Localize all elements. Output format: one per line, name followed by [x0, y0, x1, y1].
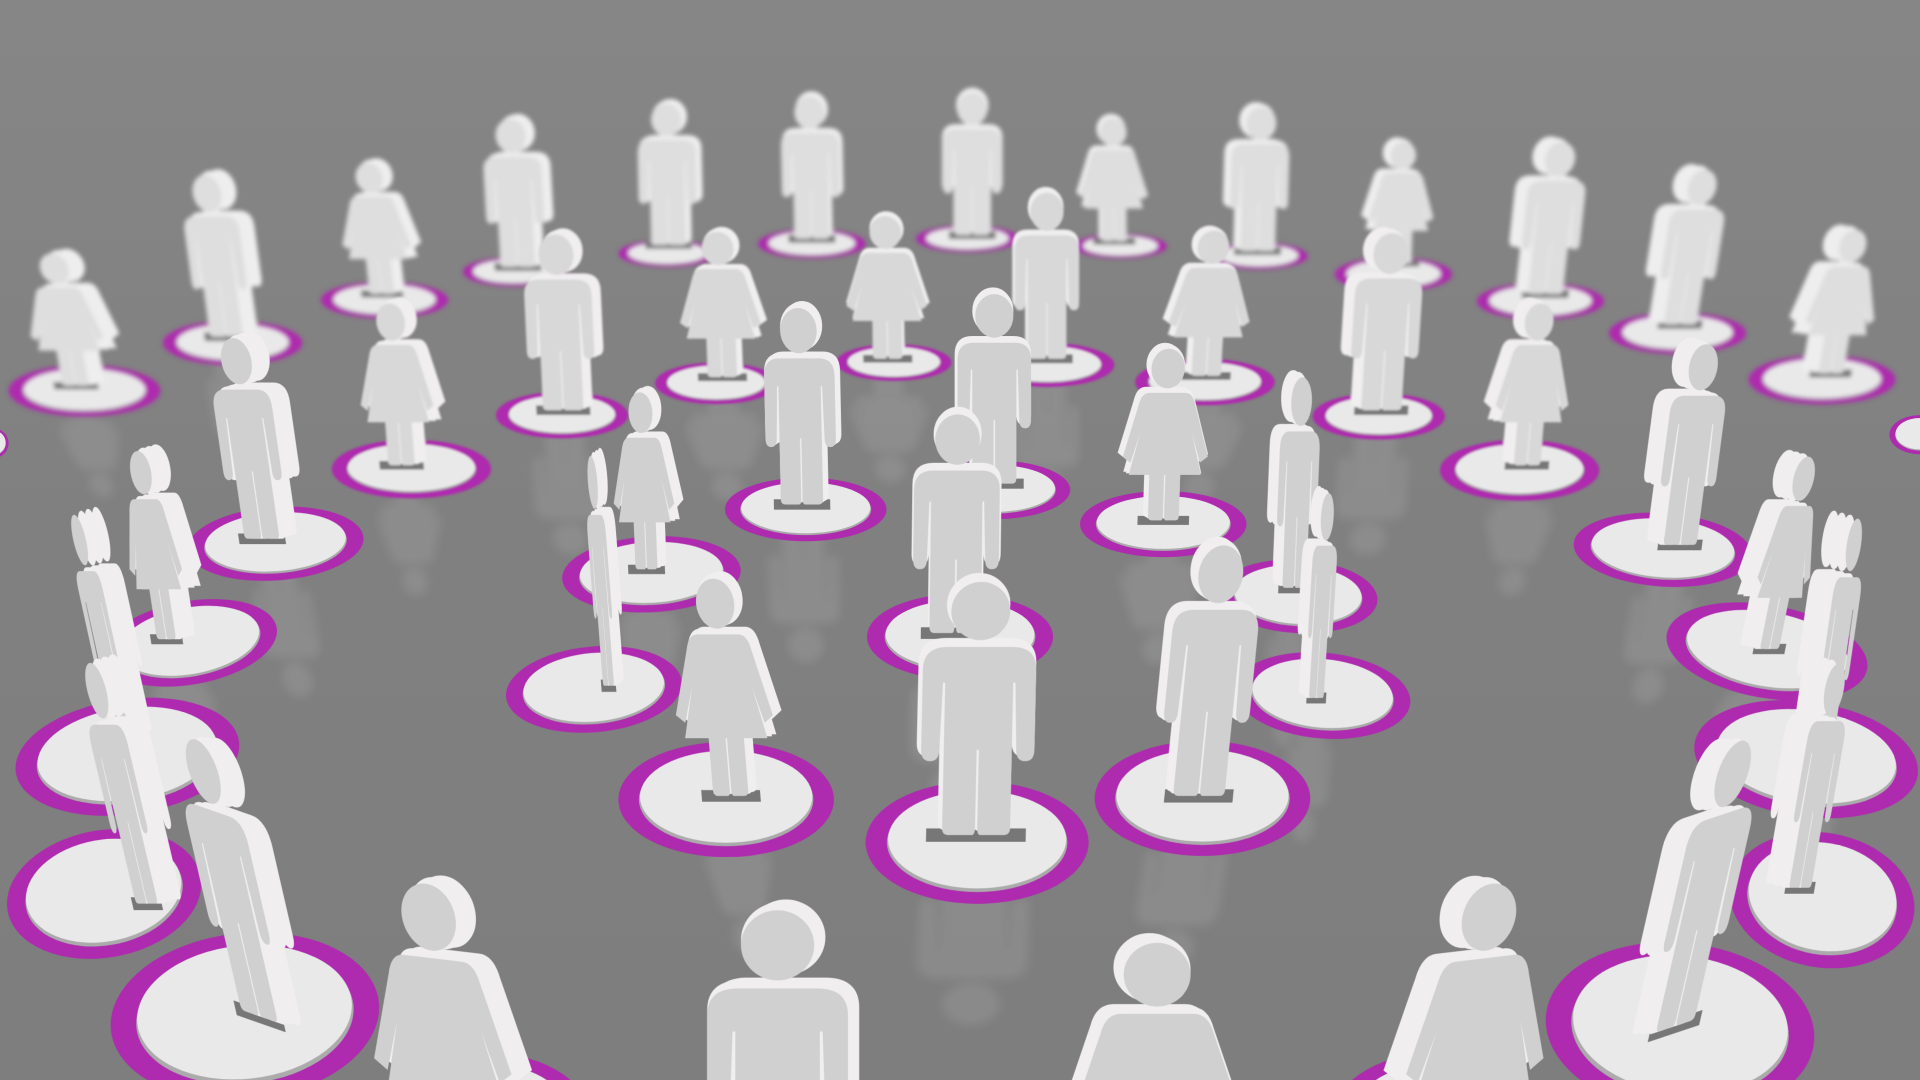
- figure 32: [867, 409, 1053, 680]
- figure 31: [96, 446, 284, 699]
- figure 43: [102, 722, 388, 1080]
- figure 34: [502, 450, 685, 740]
- figure 20: [980, 188, 1114, 387]
- figure 33: [1659, 452, 1875, 715]
- figure 39: [866, 575, 1089, 904]
- floor reflections of the figures: [49, 343, 1849, 1025]
- figure 42: [1719, 658, 1920, 982]
- figure 46: [707, 902, 856, 1080]
- figure 30: [1217, 372, 1379, 637]
- figure 1: [9, 250, 160, 416]
- figure 27: [918, 289, 1070, 519]
- figure 38: [618, 573, 834, 857]
- figure 2: [163, 171, 302, 365]
- figure 47: [1065, 936, 1242, 1080]
- figure 37: [1687, 513, 1920, 832]
- partial disc: left edge: [0, 429, 9, 458]
- figure 18: [655, 228, 778, 404]
- figure 11: [1477, 138, 1604, 320]
- figure 3: [321, 159, 448, 318]
- figure 6: [758, 92, 866, 258]
- figure 16: [332, 299, 491, 498]
- figure 35: [1231, 488, 1414, 746]
- figure 28: [1080, 344, 1247, 557]
- figure 19: [836, 212, 951, 381]
- figure 5: [618, 100, 716, 267]
- partial disc: right edge: [1889, 415, 1920, 454]
- figure 41: [0, 657, 212, 974]
- figure 23: [1440, 299, 1599, 501]
- back row of blurred figures: [9, 89, 1896, 416]
- figure 8: [1074, 115, 1167, 258]
- figure 9: [1210, 103, 1308, 269]
- figure 40: [1095, 539, 1310, 856]
- second row of lightly blurred figures: [332, 188, 1599, 501]
- figure 44: [1537, 723, 1823, 1080]
- figure 7: [916, 89, 1019, 252]
- figure 24: [1571, 339, 1755, 593]
- figure 4: [463, 115, 566, 287]
- figure 12: [1609, 165, 1746, 354]
- figure 29: [560, 388, 743, 617]
- figure 10: [1335, 138, 1452, 291]
- figure 22: [1313, 228, 1445, 440]
- figure 17: [496, 230, 628, 438]
- figure 13: [1749, 226, 1896, 404]
- figure 45: [356, 868, 594, 1080]
- figure 48: [1329, 868, 1562, 1080]
- figure 36: [8, 509, 247, 829]
- figure 25: [185, 333, 366, 586]
- figure 26: [725, 303, 887, 541]
- figure 21: [1135, 227, 1275, 405]
